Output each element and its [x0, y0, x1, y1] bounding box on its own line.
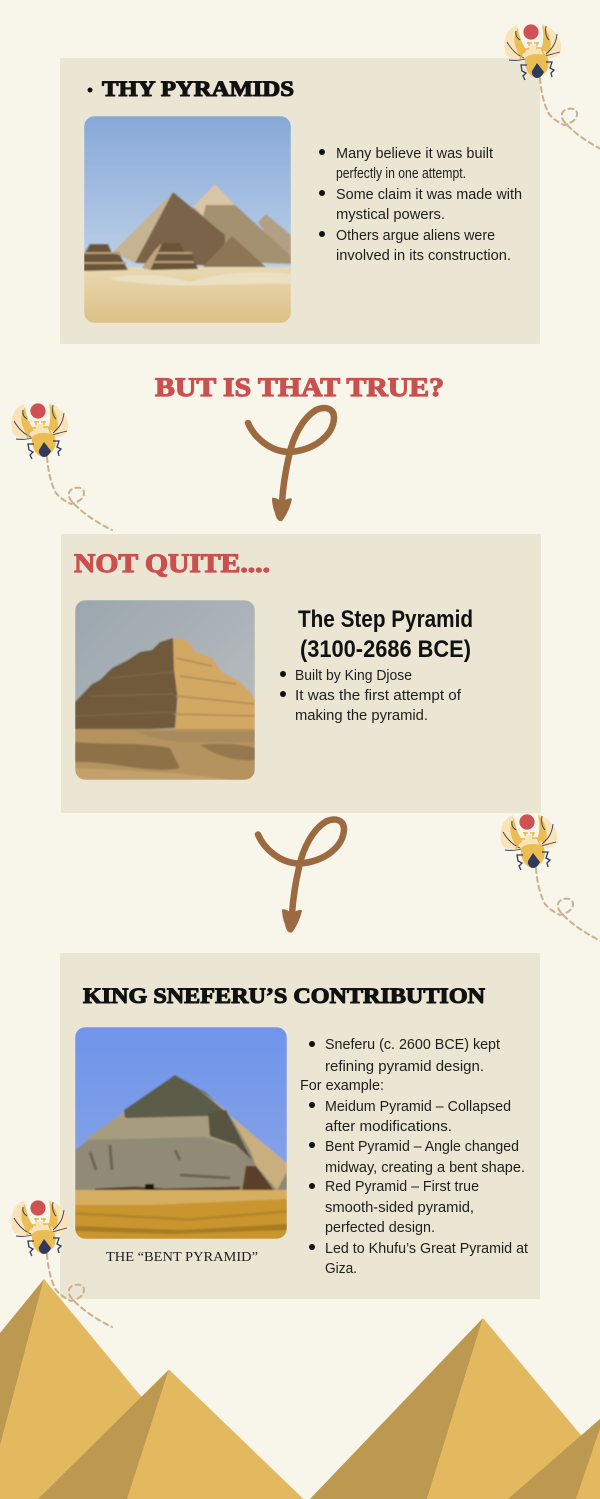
heading: king sneferu's contribution: KING SNEFERU’S CONTRIBUTION — [83, 983, 485, 1008]
text: step pyramid facts — [280, 668, 462, 724]
text: sneferu facts: perfected design. — [325, 1220, 435, 1236]
illustration: desert pyramids — [0, 1279, 600, 1499]
text: pyramid claims: perfectly in one attempt. — [336, 166, 466, 182]
arrow: first — [248, 408, 334, 521]
photo: bent pyramid — [75, 1027, 287, 1239]
text: step pyramid facts: Built by King Djose — [295, 668, 412, 684]
text: sneferu facts: Sneferu (c. 2600 BCE) kept — [325, 1037, 500, 1053]
icon: scarab top right — [504, 24, 600, 151]
panel: thy pyramids — [60, 58, 540, 344]
icon: scarab left lower — [11, 1200, 112, 1327]
text: sneferu facts: after modifications. — [325, 1119, 452, 1135]
text: sneferu facts: For example: — [300, 1078, 384, 1094]
heading: but is that true: BUT IS THAT TRUE? — [155, 373, 444, 402]
text: sneferu facts: Meidum Pyramid – Collapsed — [325, 1099, 511, 1115]
photo: step pyramid — [75, 600, 255, 780]
caption: the bent pyramid: THE “BENT PYRAMID” — [106, 1250, 258, 1265]
text: pyramid claims: Some claim it was made with — [336, 187, 522, 203]
text: sneferu facts: Led to Khufu’s Great Pyramid at — [325, 1241, 528, 1257]
heading: the step pyramid — [298, 606, 473, 663]
text: sneferu facts: Giza. — [325, 1261, 357, 1277]
text: sneferu facts: Red Pyramid – First true — [325, 1179, 479, 1195]
text: step pyramid facts: making the pyramid. — [295, 708, 428, 724]
photo: giza pyramids — [84, 116, 291, 323]
panel: step pyramid — [61, 534, 541, 813]
arrow: second — [258, 820, 344, 933]
icon: scarab right middle — [500, 814, 600, 941]
heading: the step pyramid: (3100-2686 BCE) — [300, 636, 471, 663]
text: sneferu facts: Bent Pyramid – Angle changed — [325, 1139, 519, 1155]
heading: the step pyramid: The Step Pyramid — [298, 606, 473, 633]
text: sneferu facts: midway, creating a bent shape. — [325, 1160, 525, 1176]
text: pyramid claims: Many believe it was built — [336, 146, 493, 162]
text: sneferu facts — [300, 1037, 528, 1277]
panel: king sneferu — [60, 953, 540, 1299]
text: pyramid claims: Others argue aliens were — [336, 228, 495, 244]
heading: not quite: NOT QUITE.... — [74, 549, 270, 578]
text: sneferu facts: smooth-sided pyramid, — [325, 1200, 474, 1216]
text: pyramid claims: involved in its construction. — [336, 248, 511, 264]
heading: thy pyramids: THY PYRAMIDS — [102, 76, 294, 101]
text: step pyramid facts: It was the first attempt of — [295, 688, 462, 704]
text: pyramid claims: mystical powers. — [336, 207, 445, 223]
text: sneferu facts: refining pyramid design. — [325, 1059, 484, 1075]
text: pyramid claims — [319, 146, 522, 264]
icon: scarab left upper — [11, 403, 112, 530]
